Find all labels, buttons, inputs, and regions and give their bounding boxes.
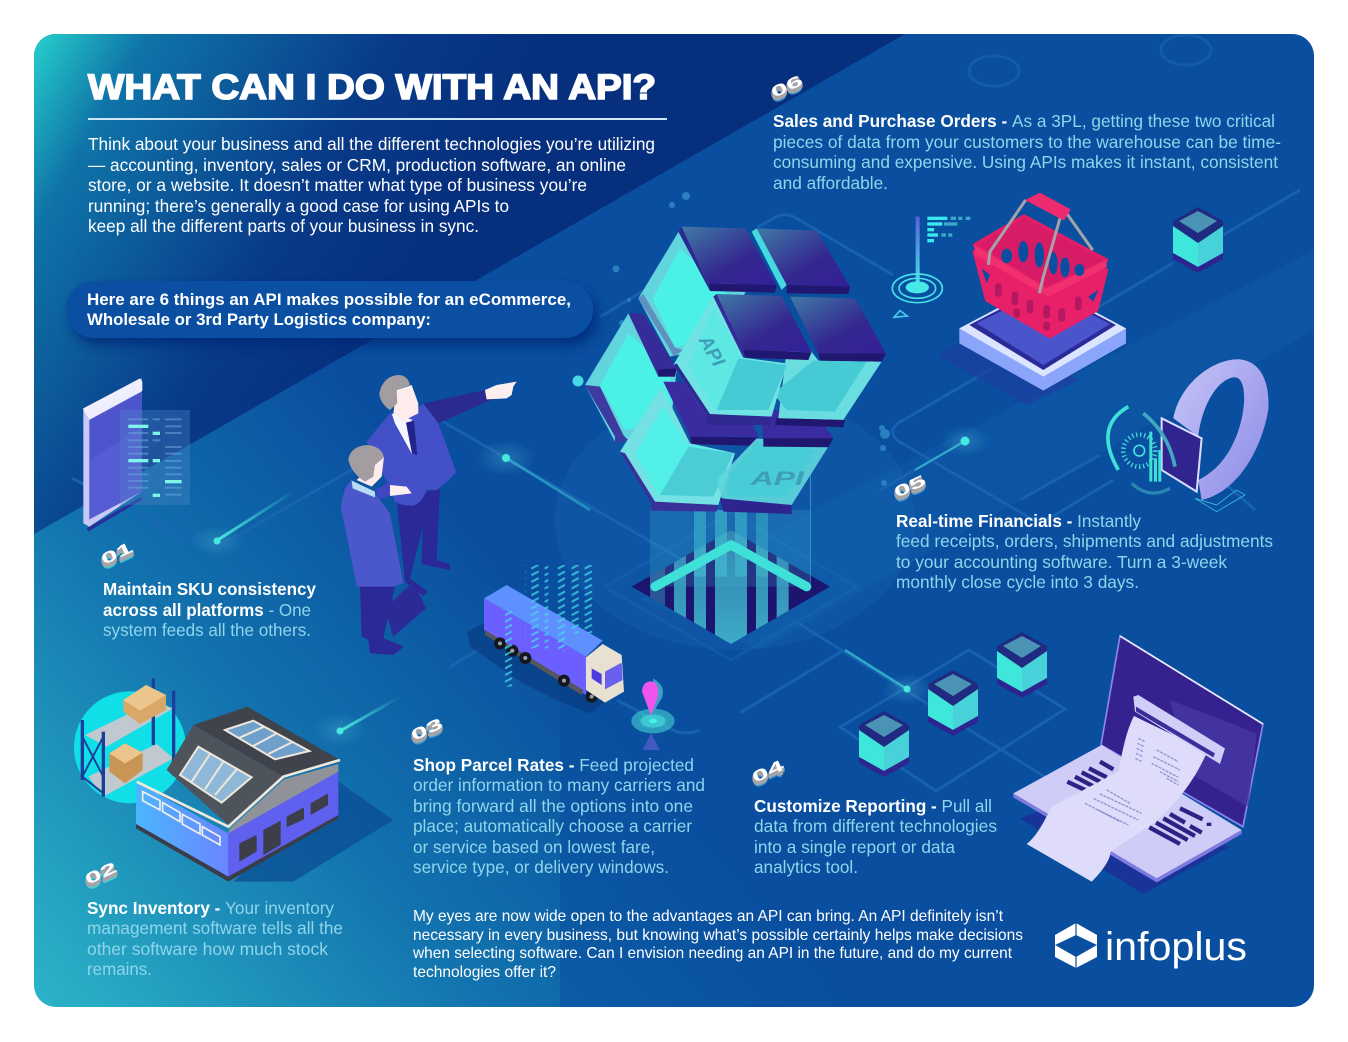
keyboard right [1149, 808, 1211, 844]
text: shop parcel rates: or service based on lowest fare, [413, 837, 655, 857]
back man hair [379, 375, 410, 410]
cube: bottom left [620, 382, 758, 512]
chassis [485, 630, 583, 695]
roof trim [137, 760, 340, 827]
text: customize reporting [754, 796, 997, 877]
cube: bottom right [717, 410, 833, 514]
front man hair [348, 445, 384, 482]
text: sync inventory: management software tells all the [87, 918, 343, 938]
number badge 06: 06 [768, 71, 806, 102]
text: real-time financials [896, 511, 1273, 592]
roof back [193, 707, 340, 777]
number badge 05: 05 [891, 475, 929, 506]
number badge 01: 01 [98, 544, 136, 575]
roof front [167, 725, 283, 825]
intro text block: — accounting, inventory, sales or CRM, production software, an online [88, 155, 626, 175]
illustration: shopping basket on platform [892, 193, 1269, 512]
icon: smart watch [1108, 359, 1269, 512]
number badge 02: 02 [82, 864, 120, 895]
box upper [123, 685, 166, 724]
text: sync inventory: remains. [87, 959, 152, 979]
logo: infoplus: infoplus [1105, 925, 1247, 969]
illustration: business men [341, 375, 517, 655]
text: sync inventory: Sync Inventory - Your inventory [87, 898, 334, 918]
number badge 01: 01 [98, 542, 136, 573]
front man collar [352, 481, 375, 497]
building shadow [233, 782, 393, 882]
text: customize reporting: data from different technologies [754, 816, 997, 836]
base [136, 815, 338, 882]
platform [632, 510, 830, 647]
text: closing paragraph: technologies offer it? [413, 964, 556, 981]
text: closing paragraph: necessary in every business, but knowing what’s possible certainly helps make decisions [413, 927, 1023, 944]
node: centre trace [476, 440, 590, 510]
text: sales and purchase orders: Sales and Purchase Orders - As a 3PL, getting these two critical [773, 111, 1275, 131]
text: closing paragraph: My eyes are now wide open to the advantages an API can bring. An API definitely isn’t [413, 908, 1004, 925]
text: sales and purchase orders: and affordable. [773, 173, 888, 193]
text: real-time financials: to your accounting software. Turn a 3-week [896, 552, 1227, 572]
back man neck and face [393, 385, 418, 422]
shelves [81, 678, 175, 797]
illustration: laptop with receipt [1013, 636, 1263, 894]
basket handles [988, 200, 1093, 293]
wheels [494, 637, 598, 703]
shelf circle [74, 691, 186, 803]
printer [1133, 695, 1225, 764]
number badge 06: 06 [768, 75, 806, 106]
front man jacket [341, 480, 403, 587]
number badge 03: 03 [408, 714, 446, 745]
back man legs [397, 488, 450, 596]
text: customize reporting: Customize Reporting - Pull all [754, 796, 992, 816]
number badge 04: 04 [749, 762, 788, 793]
back man shirt [392, 413, 412, 454]
text: shop parcel rates: order information to many carriers and [413, 775, 705, 795]
icon: location pin [631, 678, 675, 750]
receipt print [1085, 738, 1180, 825]
cube: right front [773, 297, 886, 427]
icon: server cubes [859, 632, 1047, 777]
text: real-time financials: monthly close cycle into 3 days. [896, 572, 1139, 592]
callout: 6 things: Here are 6 things an API makes possible for an eCommerce, [87, 290, 571, 309]
text: real-time financials: Real-time Financials - Instantly [896, 511, 1141, 531]
basket grip [1025, 193, 1071, 221]
text: shop parcel rates: service type, or delivery windows. [413, 857, 669, 877]
skylight front [180, 747, 252, 803]
number badge 03: 03 [408, 720, 446, 751]
number badge 02: 02 [82, 862, 120, 893]
cube: centre front [673, 294, 812, 425]
platform shadow [937, 333, 1080, 405]
trailer top [484, 585, 603, 657]
number badge 05: 05 [891, 477, 929, 508]
callout: 6 things [66, 281, 597, 345]
intro text block: keep all the different parts of your business in sync. [88, 216, 479, 236]
number badge 01: 01 [98, 540, 136, 571]
text: shop parcel rates [413, 755, 705, 877]
text: shop parcel rates: Shop Parcel Rates - Feed projected [413, 755, 694, 775]
number badge 04: 04 [749, 756, 788, 787]
box lower [109, 743, 143, 783]
cab [586, 644, 624, 703]
basket body [974, 216, 1107, 337]
skylight back [225, 721, 309, 759]
truck shadow [467, 623, 617, 713]
number badge 04: 04 [749, 760, 788, 791]
intro text block [88, 134, 655, 236]
text: maintain sku consistency: system feeds all the others. [103, 620, 311, 640]
text: real-time financials: feed receipts, orders, shipments and adjustments [896, 531, 1273, 551]
text: sync inventory: other software how much stock [87, 939, 328, 959]
text: shop parcel rates: place; automatically choose a carrier [413, 816, 692, 836]
text: sales and purchase orders: consuming and expensive. Using APIs makes it instant, consistent [773, 152, 1278, 172]
screen [1101, 636, 1263, 827]
laptop shadow [1020, 810, 1230, 894]
back man arm [423, 390, 495, 423]
number badge 05: 05 [891, 473, 929, 504]
text: customize reporting: into a single report or data [754, 837, 955, 857]
gable [228, 764, 338, 833]
front man hand [390, 485, 412, 496]
text: sales and purchase orders: pieces of data from your customers to the warehouse can be time- [773, 132, 1281, 152]
intro text block: Think about your business and all the different technologies you’re utilizing [88, 134, 655, 154]
wall windows [143, 792, 220, 845]
cube: back left [638, 227, 777, 357]
number badge 02: 02 [82, 860, 120, 891]
number badge 05: 05 [891, 471, 929, 502]
number badge 04: 04 [749, 758, 788, 789]
illustration: warehouse [74, 678, 393, 882]
text: maintain sku consistency [103, 579, 316, 640]
dock doors [239, 793, 328, 862]
node: sku trace [189, 490, 296, 557]
text: closing paragraph [412, 908, 1023, 981]
intro text block: store, or a website. It doesn’t matter what type of business you’re [88, 175, 587, 195]
illustration: delivery truck [467, 565, 624, 713]
cube: centre front: API [693, 331, 729, 371]
cube: far left [585, 313, 677, 443]
number badge 02: 02 [82, 858, 120, 889]
text: sales and purchase orders [773, 111, 1281, 193]
number badge 06: 06 [768, 73, 806, 104]
title: WHAT CAN I DO WITH AN API? [88, 68, 656, 107]
front man forearm [375, 482, 391, 500]
illustration: central API cube stack [585, 227, 886, 647]
text: maintain sku consistency: across all platforms - One [103, 600, 311, 620]
text: sync inventory [87, 898, 343, 979]
briefcase [385, 582, 426, 637]
back man hand [485, 382, 517, 399]
icon: phone with data table [83, 378, 190, 532]
number badge 01: 01 [98, 538, 136, 569]
node: reporting trace [845, 650, 933, 705]
front man face [357, 457, 384, 487]
text: maintain sku consistency: Maintain SKU consistency [103, 579, 316, 599]
front man legs [360, 585, 404, 655]
keyboard left [1067, 762, 1113, 790]
right wall [228, 767, 338, 880]
number badge 03: 03 [408, 716, 446, 747]
base [1013, 793, 1242, 882]
callout: 6 things: Wholesale or 3rd Party Logistics company: [87, 310, 431, 329]
intro text block: running; there’s generally a good case for using APIs to [88, 196, 509, 216]
receipt [1027, 716, 1207, 882]
text: customize reporting: analytics tool. [754, 857, 858, 877]
trailer side [484, 598, 586, 695]
node: warehouse trace [312, 697, 400, 748]
floating data lines [505, 565, 597, 687]
back man jacket [367, 403, 456, 506]
cube: bottom right: API [749, 469, 805, 490]
icon: data beacon [892, 217, 970, 317]
title divider [88, 118, 667, 120]
left wall [136, 782, 228, 880]
number badge 03: 03 [408, 718, 446, 749]
back man tie [406, 421, 417, 455]
text: shop parcel rates: bring forward all the options into one [413, 796, 693, 816]
logo: infoplus [1055, 923, 1247, 969]
icon: server cube top right [1173, 207, 1223, 273]
node: financials trace [915, 425, 991, 470]
number badge 06: 06 [768, 77, 806, 108]
platform [959, 284, 1126, 391]
cube: back right top [752, 228, 850, 294]
text: closing paragraph: when selecting software. Can I envision needing an API in the future, and do my current [412, 945, 1013, 962]
